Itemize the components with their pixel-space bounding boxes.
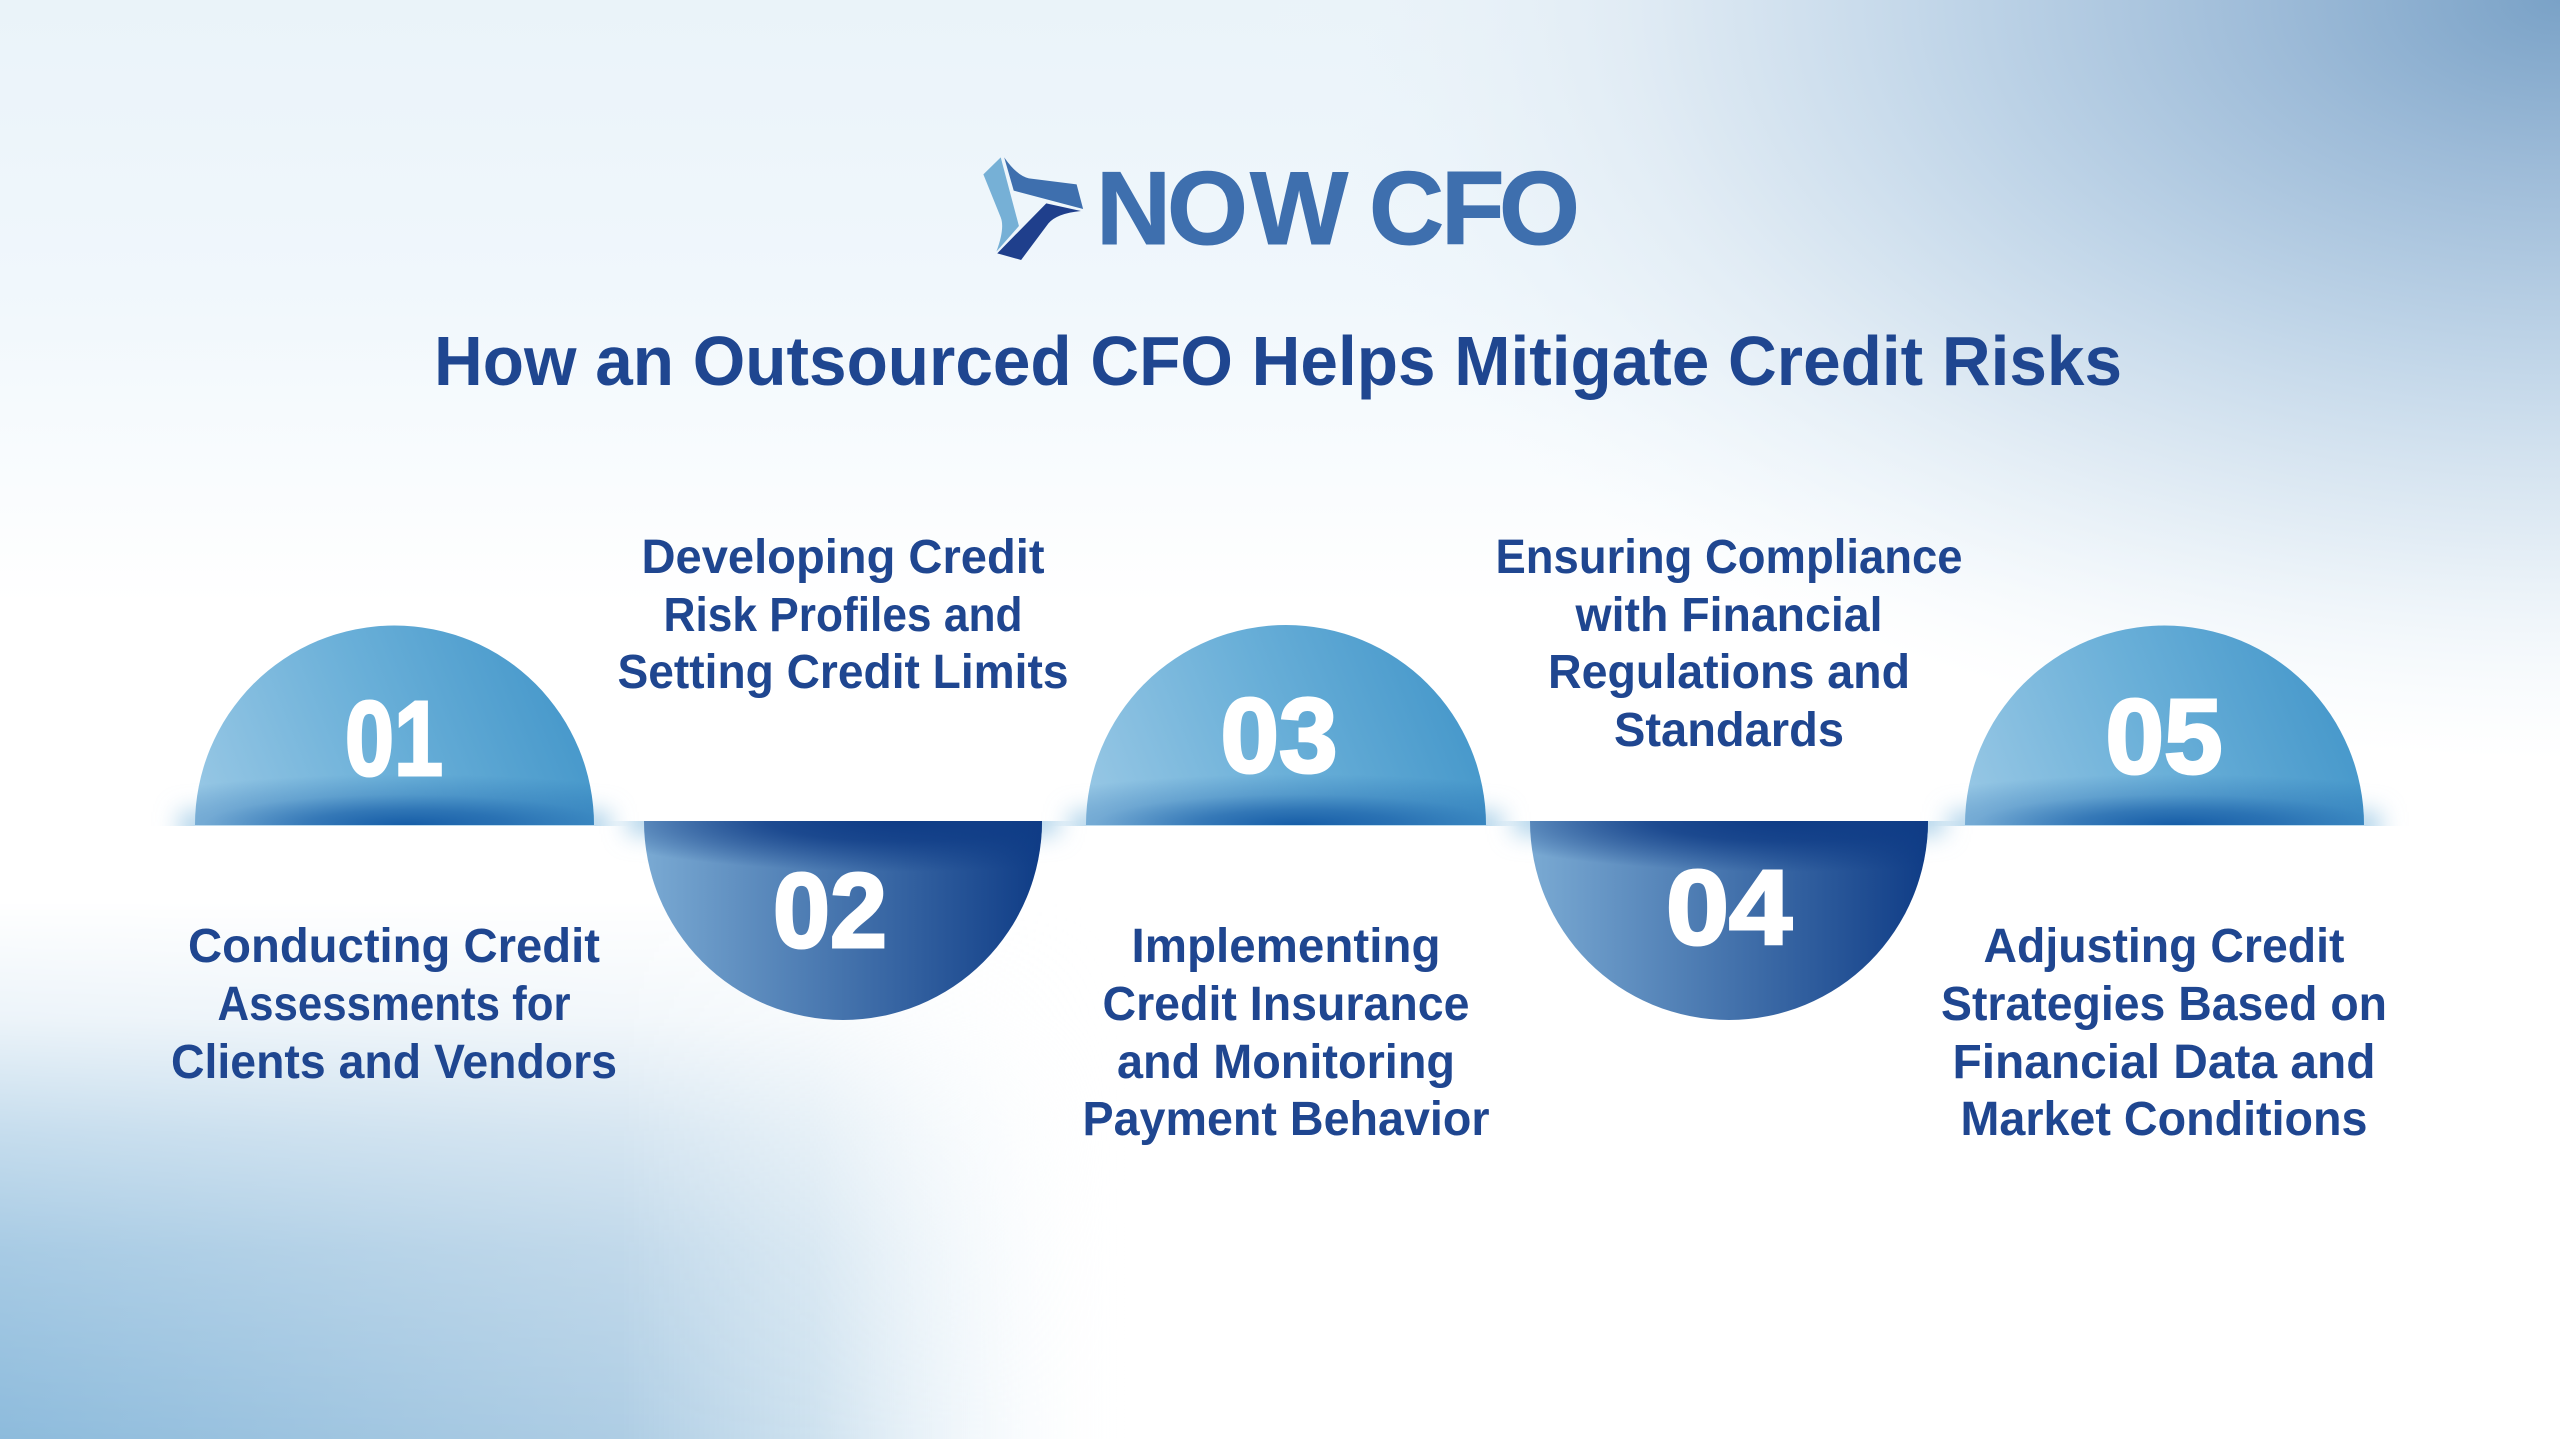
step 05 text: Market Conditions — [1960, 1093, 2368, 1146]
step 05 text: Strategies Based on — [1941, 978, 2387, 1031]
step 04 text: with Financial — [1575, 589, 1882, 642]
number 03: 03 — [1220, 677, 1338, 795]
timeline glow along the baseline — [180, 806, 2380, 840]
step 03 text: Credit Insurance — [1102, 978, 1470, 1031]
step 01 text: Assessments for — [218, 978, 570, 1031]
step 03 text: and Monitoring — [1117, 1036, 1455, 1089]
step 05 text: Financial Data and — [1952, 1036, 2376, 1089]
step 02 text: Risk Profiles and — [664, 589, 1022, 642]
number 04: 04 — [1666, 849, 1792, 967]
icon: logo arrow mark — [983, 157, 1083, 260]
step 03 text: Implementing — [1132, 920, 1440, 973]
step 03 text: Payment Behavior — [1082, 1093, 1490, 1146]
step 05 semicircle — [1965, 626, 2364, 825]
number 02: 02 — [773, 852, 887, 970]
step 01 semicircle — [195, 626, 594, 825]
step 01 text — [171, 920, 617, 1089]
number 01: 01 — [345, 680, 443, 798]
step 05 text — [1941, 920, 2387, 1146]
step 03 text — [1082, 920, 1490, 1146]
step 02 text: Setting Credit Limits — [618, 646, 1068, 699]
step 03 semicircle — [1086, 625, 1486, 825]
step 05 text: Adjusting Credit — [1984, 920, 2345, 973]
step 04 semicircle — [1530, 821, 1928, 1020]
number 05: 05 — [2106, 678, 2222, 796]
step 01 text: Conducting Credit — [188, 920, 600, 973]
logo wordmark: NOW CFO — [1096, 151, 1580, 267]
step 04 text — [1496, 531, 1962, 757]
title: How an Outsourced CFO Helps Mitigate Credit Risks — [434, 322, 2122, 400]
step 02 text — [618, 531, 1068, 699]
step 04 text: Ensuring Compliance — [1496, 531, 1962, 584]
step 04 text: Standards — [1614, 704, 1844, 757]
step 04 text: Regulations and — [1548, 646, 1910, 699]
step 02 semicircle — [644, 821, 1042, 1020]
step 02 text: Developing Credit — [642, 531, 1045, 584]
logo: NOW CFO — [983, 151, 1580, 267]
step 01 text: Clients and Vendors — [171, 1036, 617, 1089]
